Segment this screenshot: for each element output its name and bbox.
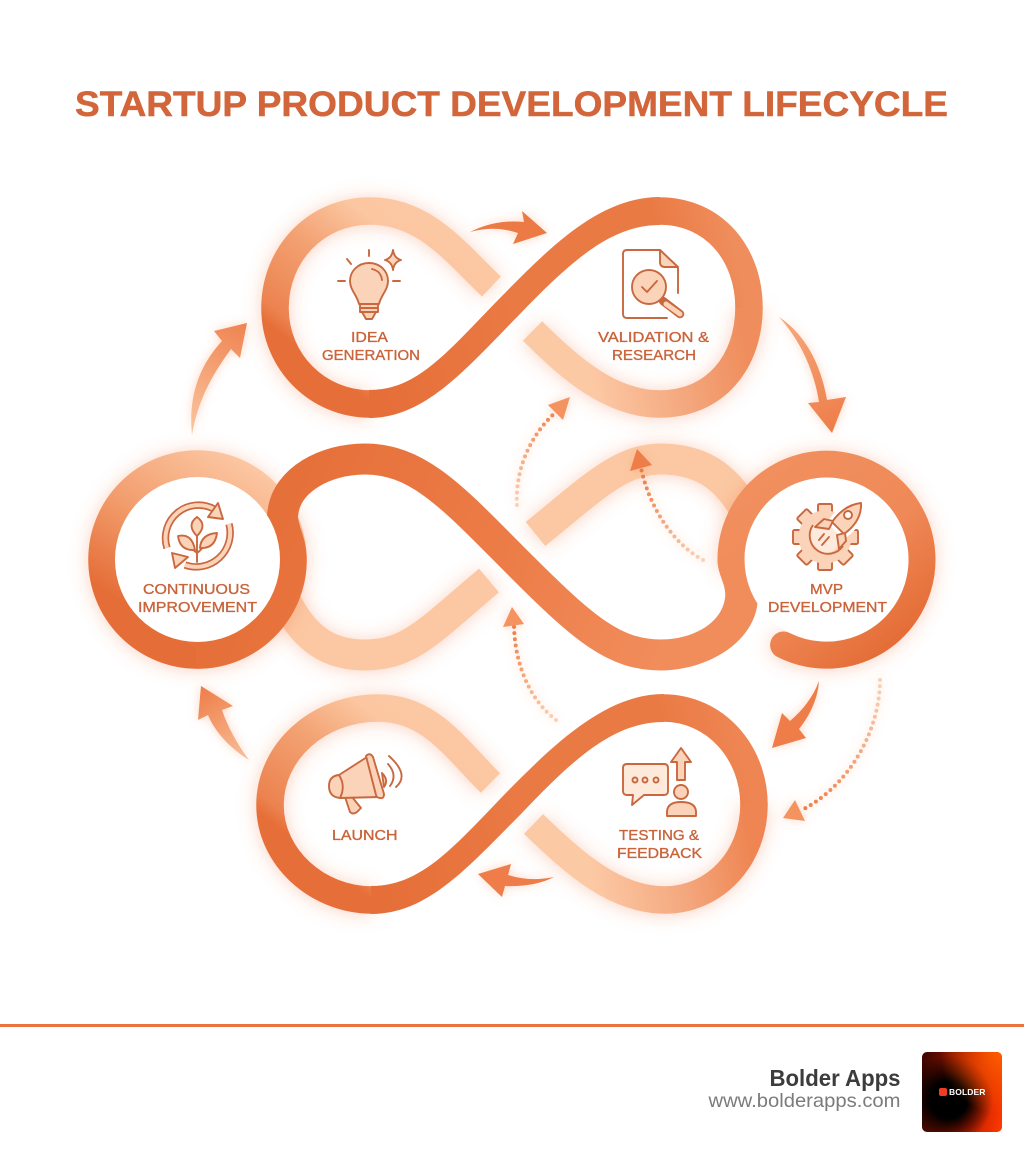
arrow: validation to MVP [779,317,846,433]
panel: idea generation and validation loop [275,197,749,418]
label: continuous improvement: IMPROVEMENT [138,599,257,616]
strand: lower right of left ring [196,525,293,655]
label: validation and research: RESEARCH [612,347,696,364]
arrow: continuous improvement to idea generation [191,323,247,435]
icon: light bulb [338,250,401,319]
icon: gear with rocket [793,503,861,570]
arrow: launch to continuous improvement [198,686,249,760]
icon: plant in circular arrows [165,503,230,568]
label: launch: LAUNCH [332,827,398,844]
dotted arrow: to fading right bend [630,449,703,560]
label: testing and feedback: TESTING & [619,827,699,844]
strand: fading right loop [532,307,749,404]
label: idea generation: GENERATION [322,347,420,364]
strand: crossing band [371,694,664,914]
arrow: MVP to testing [772,681,819,748]
strand: right loop top [663,708,754,805]
strand: crossing band [369,197,660,418]
label: MVP development: DEVELOPMENT [768,599,887,616]
disc: MVP development [744,478,908,642]
arrow: idea generation to validation [470,211,547,244]
strand: fading left loop [270,708,490,900]
brand name: Bolder Apps [770,1065,900,1091]
strand: right loop top [659,211,749,308]
icon: chat bubble with person and up arrow [623,748,696,816]
brand url: www.bolderapps.com [707,1090,900,1112]
icon: document with magnifier [623,250,680,318]
panel: continuous improvement and MVP loop [102,459,922,670]
icon: megaphone [329,754,402,814]
ring: MVP development [731,464,922,655]
strand: fading right loop [534,804,754,900]
label: idea generation: IDEA [351,329,388,346]
disc: continuous improvement [115,477,280,642]
arrow: testing to launch [478,864,554,897]
strand: fading left loop [275,211,492,404]
strand: bend into MVP ring [660,560,757,670]
label: continuous improvement: CONTINUOUS [143,581,250,598]
title: STARTUP PRODUCT DEVELOPMENT LIFECYCLE [75,85,948,124]
footer divider [0,1024,1024,1027]
ring: continuous improvement [102,464,293,655]
strand: fading right bend [536,459,745,534]
logo: Bolder badge: BOLDER [949,1087,986,1097]
dotted arrow: to validation [517,397,570,505]
label: testing and feedback: FEEDBACK [617,845,702,862]
dotted arrow: to testing and feedback [783,680,880,821]
logo: Bolder badge [922,1052,1002,1132]
label: MVP development: MVP [810,581,843,598]
strand: central crossing band [282,459,661,655]
panel: launch and testing loop [270,694,754,914]
label: validation and research: VALIDATION & [598,329,709,346]
dotted arrow: to fading left bend [503,607,556,720]
strand: fading left bend [285,580,489,655]
